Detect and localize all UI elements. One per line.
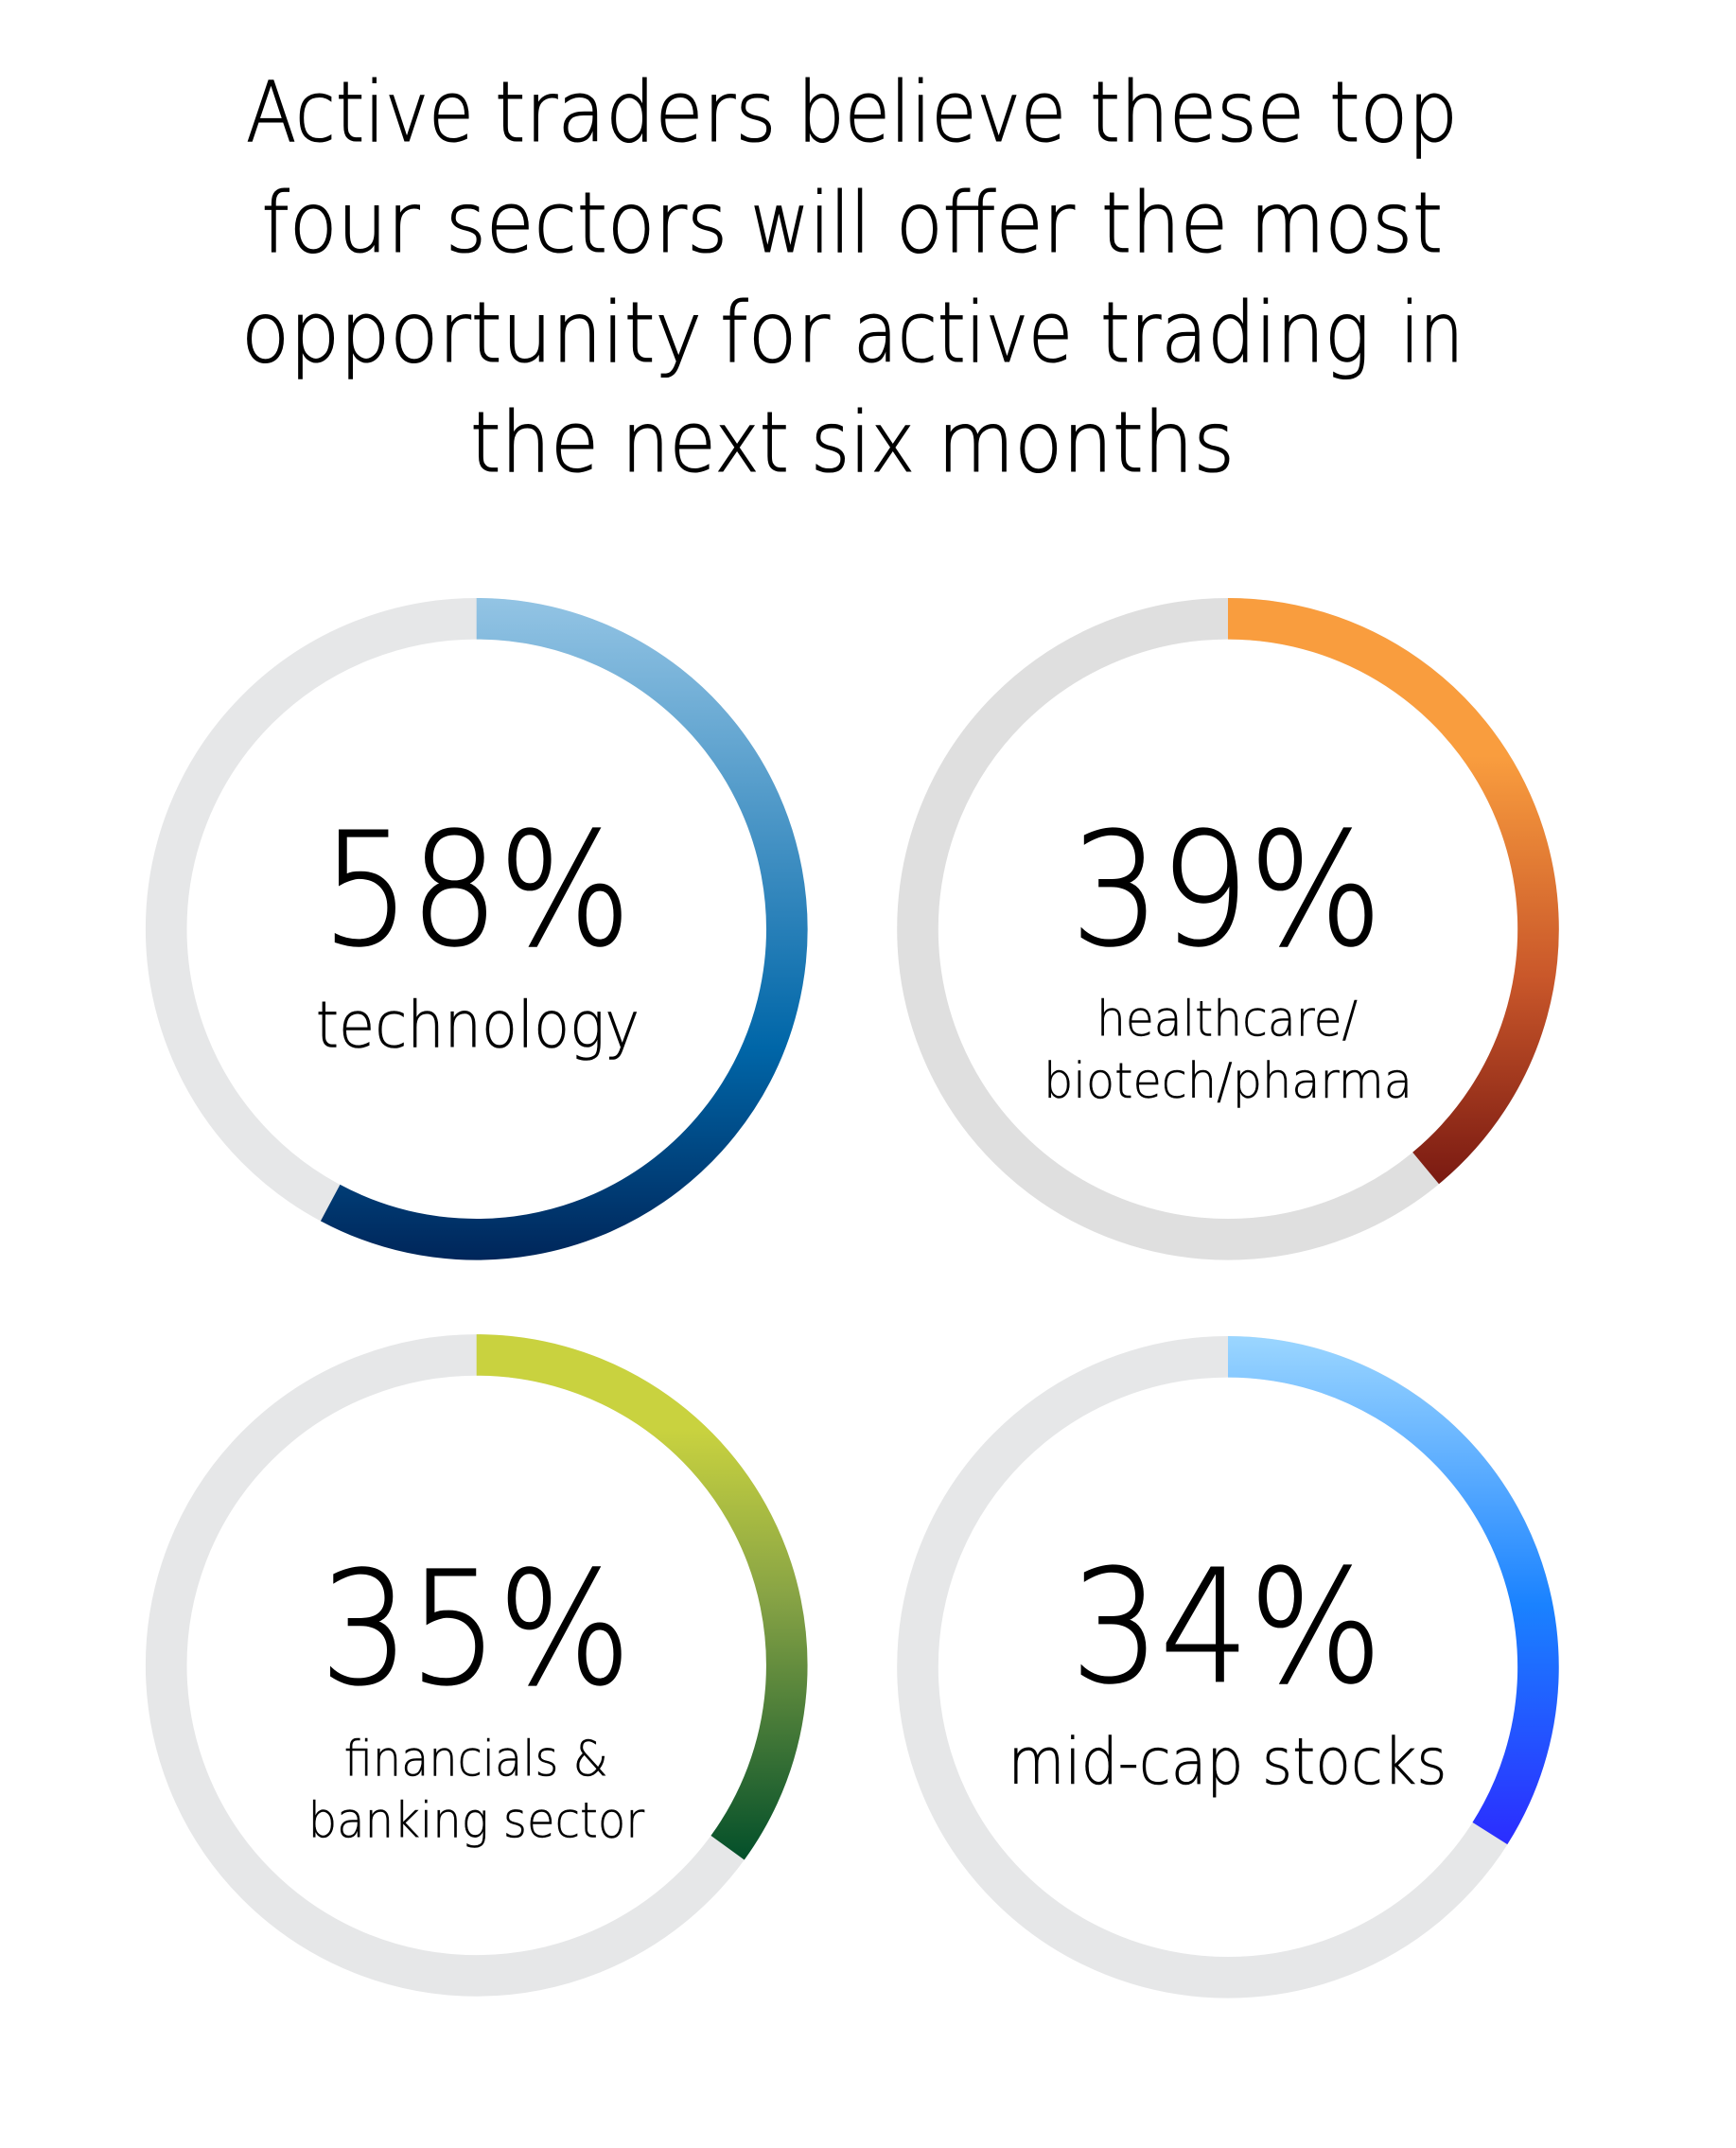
ring: healthcare track: [918, 619, 1538, 1240]
label: financials and banking sector: financials &: [344, 1732, 608, 1788]
title: believe: [798, 63, 1066, 161]
title: four: [261, 174, 420, 272]
arc: technology 58 percent: [330, 619, 787, 1240]
title: trading: [1100, 284, 1370, 381]
label: healthcare/biotech/pharma: healthcare/: [1096, 992, 1358, 1048]
title: traders: [495, 63, 776, 161]
title: will: [750, 174, 870, 272]
value: 39%: 39%: [1071, 800, 1382, 981]
arc: financials 35 percent: [477, 1355, 787, 1848]
title: months: [938, 394, 1235, 491]
ring: mid-cap track: [918, 1357, 1538, 1978]
value: 35%: 35%: [320, 1539, 631, 1720]
panel: mid-cap stocks 34%: [918, 1357, 1538, 1978]
ring: technology track: [167, 619, 787, 1240]
panel: financials 35%: [167, 1355, 787, 1976]
title: six: [811, 394, 915, 491]
title: opportunity: [241, 284, 702, 381]
title: in: [1400, 284, 1464, 381]
title: next: [622, 394, 789, 491]
title: these: [1090, 63, 1305, 161]
value: 58%: 58%: [322, 800, 631, 981]
title: the: [1101, 174, 1228, 272]
label: healthcare/biotech/pharma: biotech/pharma: [1043, 1053, 1412, 1110]
title: the: [470, 394, 599, 491]
label: financials and banking sector: banking sector: [308, 1793, 645, 1850]
title: sectors: [446, 174, 728, 272]
title: Active: [246, 63, 474, 161]
label: mid-cap stocks: mid-cap stocks: [1008, 1725, 1447, 1800]
arc: mid-cap 34 percent: [1228, 1357, 1538, 1834]
title: offer: [896, 174, 1076, 272]
title: active: [853, 284, 1073, 381]
label: technology: technology: [316, 989, 640, 1064]
value: 34%: 34%: [1071, 1537, 1382, 1718]
title: most: [1250, 174, 1443, 272]
panel: technology 58%: [167, 619, 787, 1240]
arc: healthcare 39 percent: [1228, 619, 1538, 1168]
title: [241, 63, 1464, 491]
panel: healthcare 39%: [918, 619, 1538, 1240]
label: healthcare/biotech/pharma: [1043, 992, 1412, 1110]
title: top: [1329, 63, 1458, 161]
ring: financials track: [167, 1355, 787, 1976]
title: for: [720, 284, 831, 381]
label: financials and banking sector: [308, 1732, 645, 1850]
